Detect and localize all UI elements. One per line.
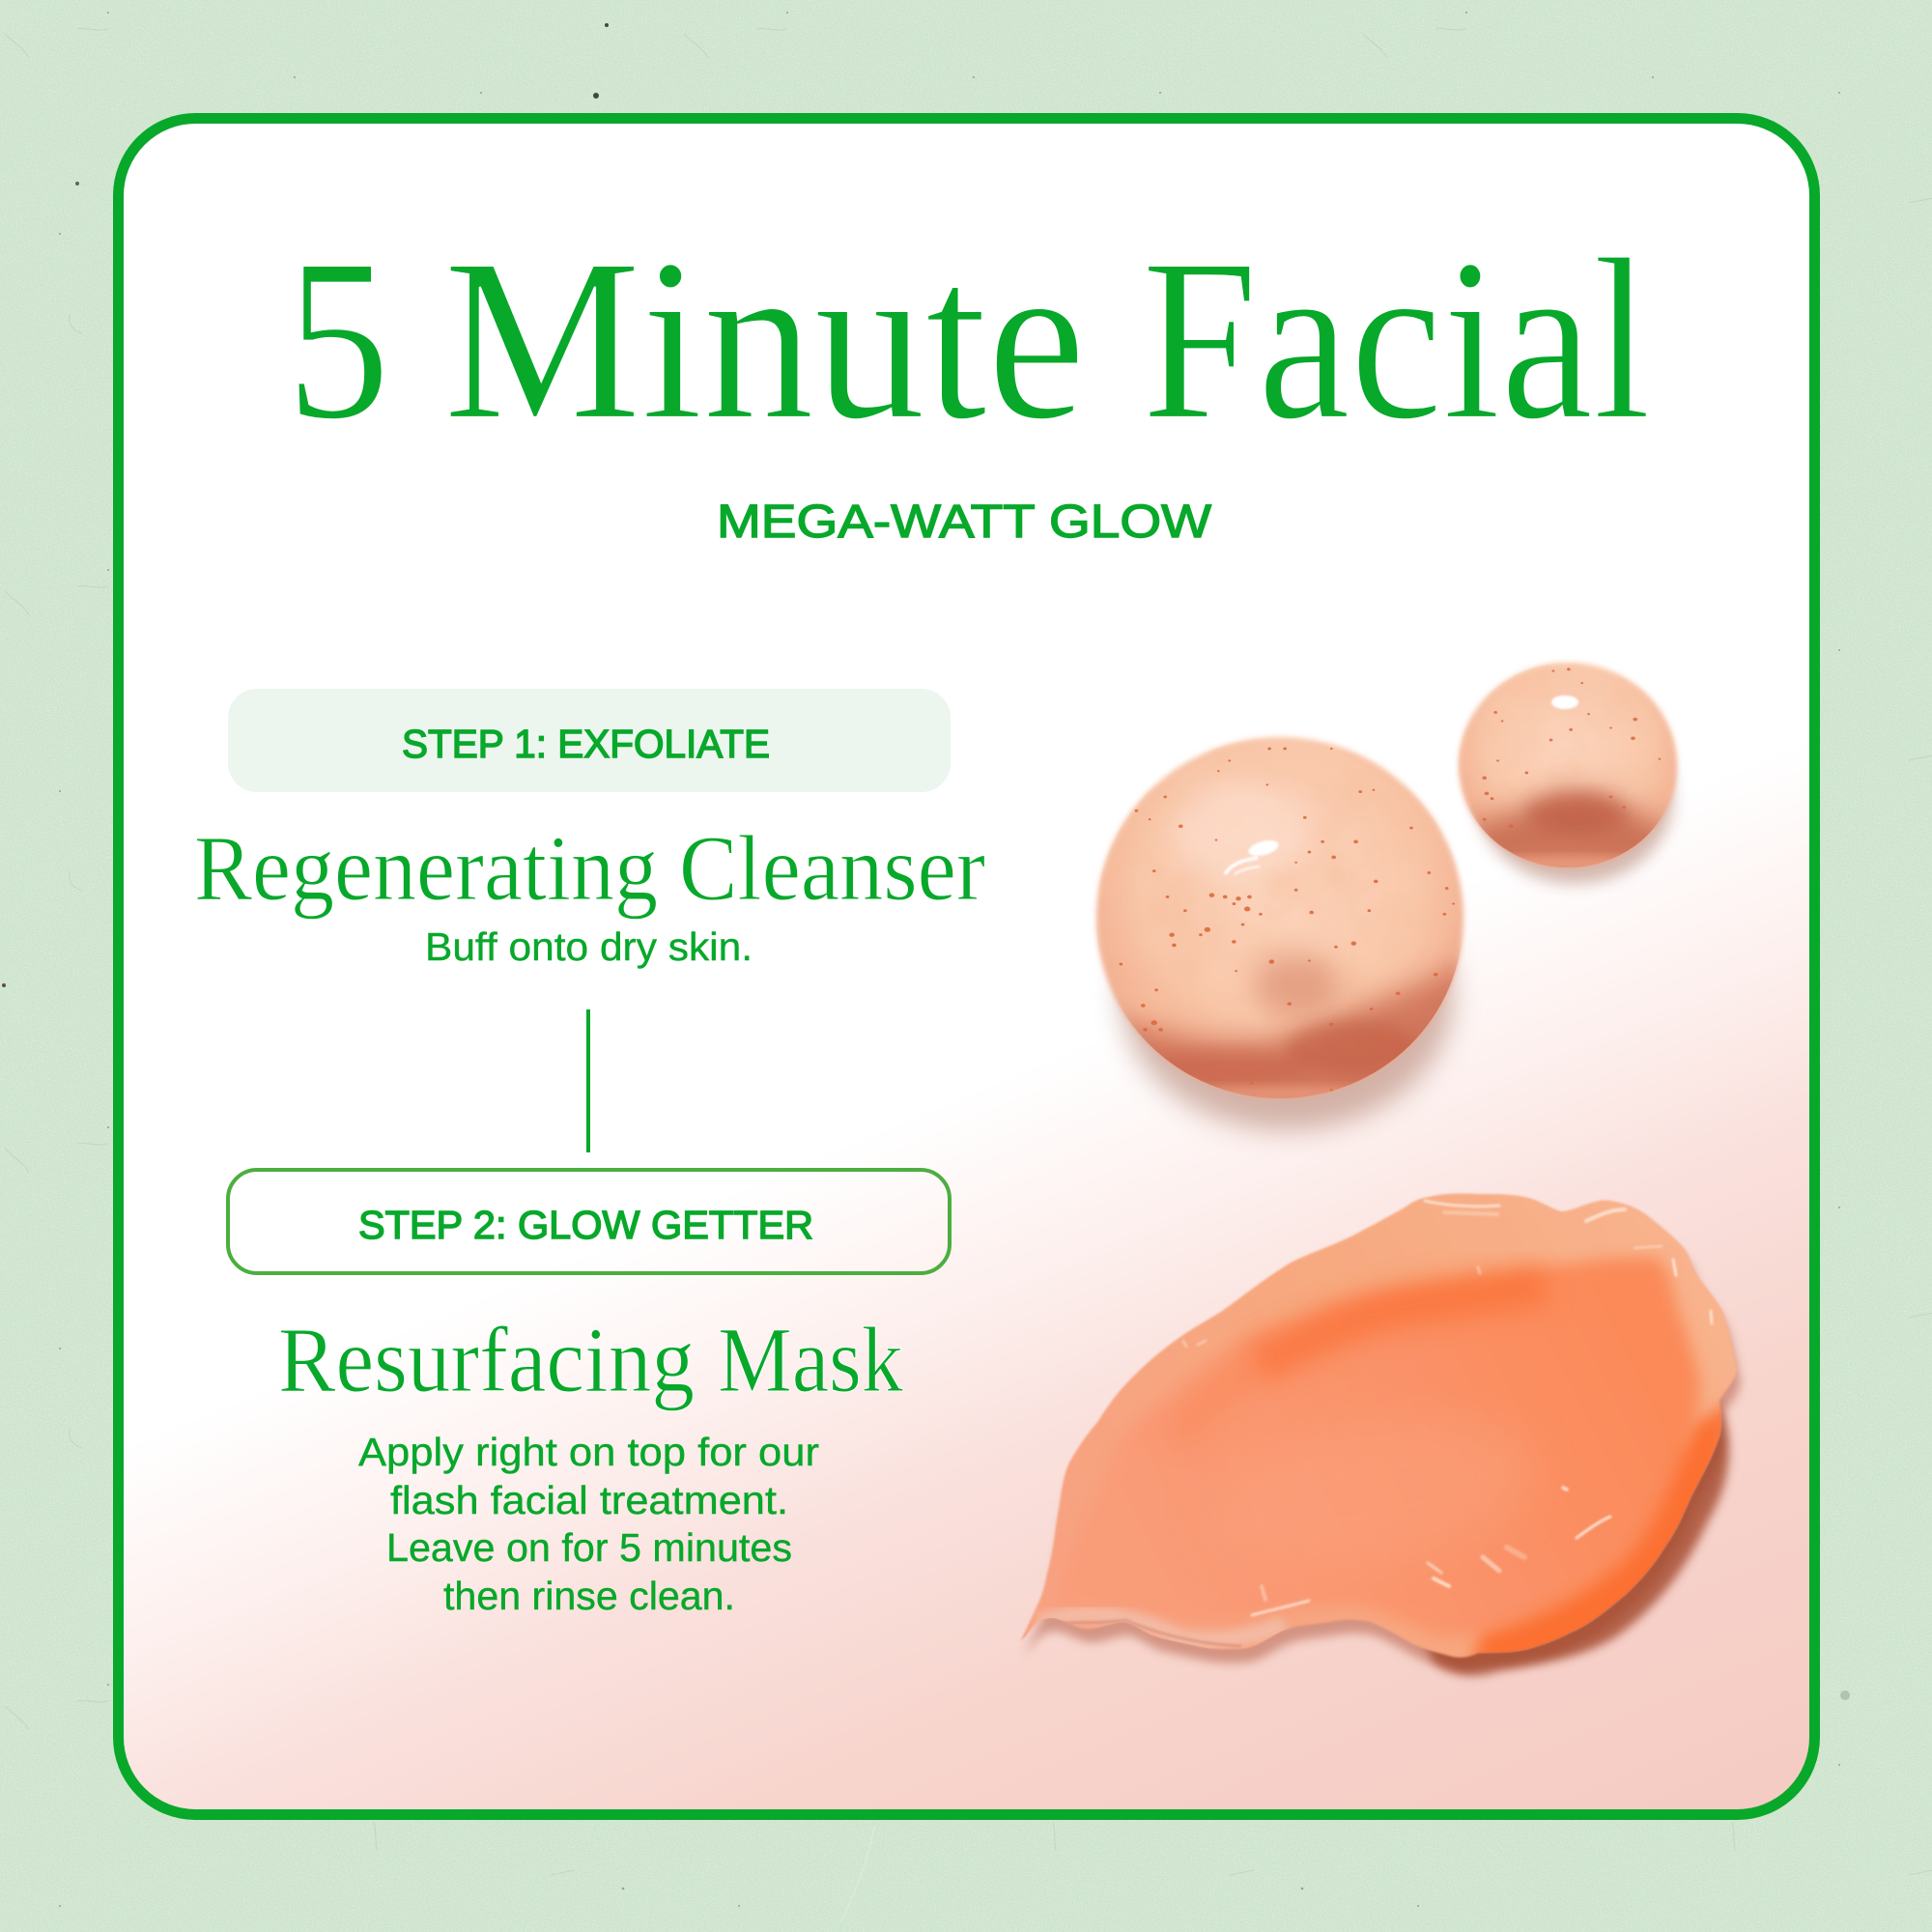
inner bowl of mask <box>1058 1258 1701 1637</box>
step 2 pill: STEP 2: GLOW GETTER <box>358 1203 813 1247</box>
product name: regenerating cleanser <box>194 816 985 920</box>
pale centre of bowl <box>1331 1430 1520 1534</box>
step 2 pill <box>228 1170 950 1273</box>
title: 5 <box>286 211 390 468</box>
title: Minute <box>443 211 1086 468</box>
product name: resurfacing mask: Resurfacing <box>278 1308 695 1411</box>
step 1 pill <box>228 689 951 792</box>
gloss highlights on mask <box>1183 1201 1712 1615</box>
step 2 instructions: flash facial treatment. <box>390 1478 788 1522</box>
panel: rounded card with gradient <box>118 118 1814 1814</box>
mask lip <box>1020 1193 1737 1658</box>
title <box>286 211 1651 468</box>
product name: resurfacing mask: Mask <box>718 1308 903 1411</box>
speckles on small drop <box>1482 668 1661 828</box>
product name: regenerating cleanser: Cleanser <box>679 816 985 920</box>
title: Facial <box>1142 211 1651 468</box>
bright orange rim lower right <box>1473 1401 1734 1666</box>
step 2 instructions: then rinse clean. <box>443 1574 735 1618</box>
speckles on large drop <box>1119 748 1455 1091</box>
step 1 pill: STEP 1: EXFOLIATE <box>402 722 770 766</box>
highlight on small drop <box>1551 696 1578 709</box>
step 2 section <box>228 1170 950 1618</box>
step 1 section <box>194 689 985 969</box>
image: small cleanser drop <box>1459 663 1681 884</box>
product name: regenerating cleanser: Regenerating <box>194 816 658 920</box>
step 2 instructions: Apply right on top for our <box>358 1430 819 1474</box>
connector line between steps <box>586 1009 590 1152</box>
highlight on large drop <box>1225 838 1280 874</box>
subtitle: MEGA-WATT GLOW <box>717 497 1212 548</box>
step 1 instruction: Buff onto dry skin. <box>425 924 753 969</box>
cast shadow of mask <box>1024 1207 1741 1675</box>
pink translucent bottom lip <box>1038 1615 1285 1640</box>
image: large cleanser drop <box>1092 734 1488 1130</box>
deep orange band under ridge <box>1256 1285 1546 1367</box>
step 2 instructions: Leave on for 5 minutes <box>386 1525 792 1570</box>
step 2 instructions <box>358 1430 819 1618</box>
image: resurfacing mask swatch <box>1020 1193 1741 1675</box>
